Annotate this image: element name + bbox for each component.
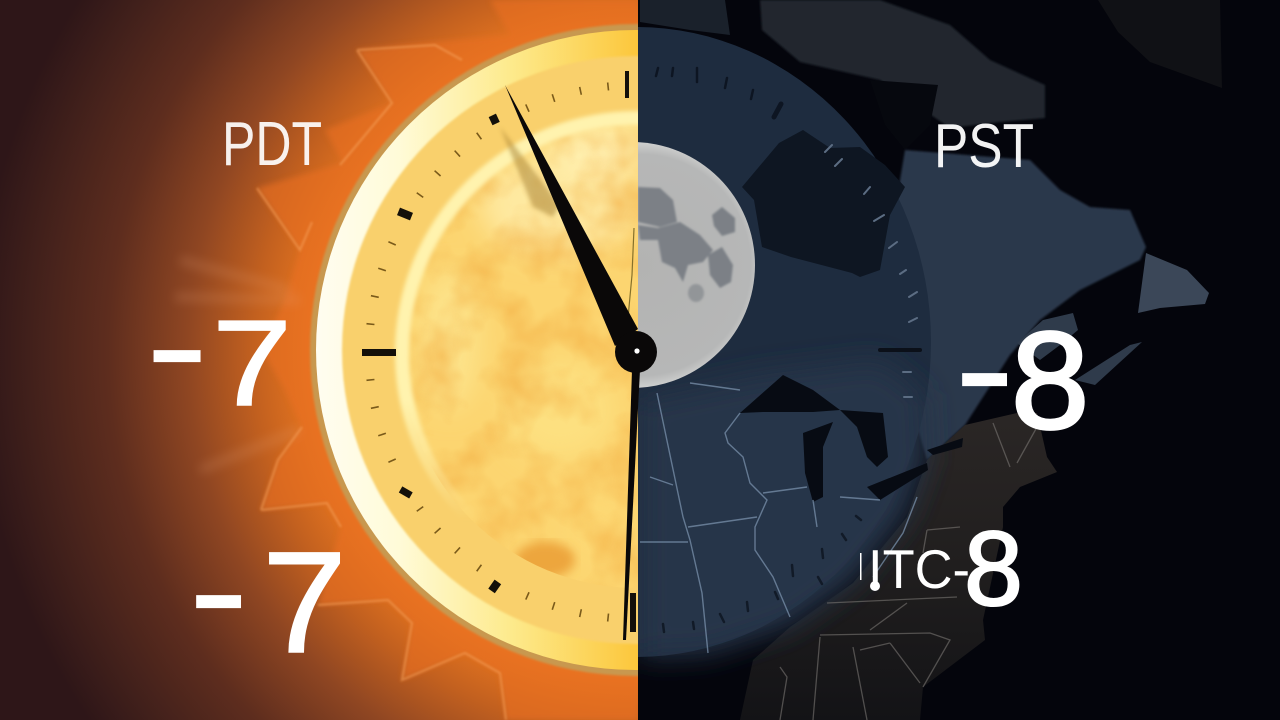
label: minus 7 upper: - <box>145 257 209 430</box>
map: eastern United States <box>740 413 1057 720</box>
sun surface texture <box>414 124 638 584</box>
map: northern islands <box>640 0 1222 128</box>
label: minus 8 upper: - <box>954 274 1015 460</box>
map: Nova Scotia and gulf islands <box>1017 313 1142 385</box>
dial disc <box>638 27 931 657</box>
second hand <box>628 228 634 318</box>
dial ticks <box>656 68 920 632</box>
label: minus 7 upper: 7 <box>212 295 292 432</box>
label: minus 7 upper <box>145 257 292 432</box>
label: minus 7 lower <box>188 496 347 683</box>
panel: PST nighttime half <box>638 0 1222 720</box>
sun clock face <box>309 23 638 677</box>
label: minus 7 lower: 7 <box>262 523 347 683</box>
clock major ticks on sun <box>362 71 636 632</box>
map: great lakes <box>740 375 963 502</box>
minute hand <box>505 85 638 346</box>
lower hand <box>623 370 640 640</box>
label: minus 8 upper: 8 <box>1011 303 1089 458</box>
map: state borders outside dial <box>780 423 1037 720</box>
icon: sun flare rays <box>175 0 638 720</box>
clock minor ticks on sun <box>366 82 609 622</box>
map: state borders inside dial <box>640 383 917 653</box>
label: PST: PST <box>934 112 1034 181</box>
map: Newfoundland <box>1138 253 1209 313</box>
label: UTC minus 8: ITC- <box>868 538 970 600</box>
icon: moon <box>638 142 755 388</box>
label: UTC minus 8 <box>860 510 1023 628</box>
label: UTC minus 8: 8 <box>964 510 1023 628</box>
minute hand shadow on sun <box>500 127 560 217</box>
label: PDT: PDT <box>222 110 322 179</box>
label: minus 8 upper <box>954 274 1089 460</box>
label: minus 7 lower: - <box>188 496 249 682</box>
map: Hudson Bay <box>742 130 905 277</box>
clock hands <box>505 85 657 640</box>
hub <box>615 331 657 373</box>
map: eastern Canada <box>880 150 1146 460</box>
panel: PDT daytime half <box>0 0 638 720</box>
